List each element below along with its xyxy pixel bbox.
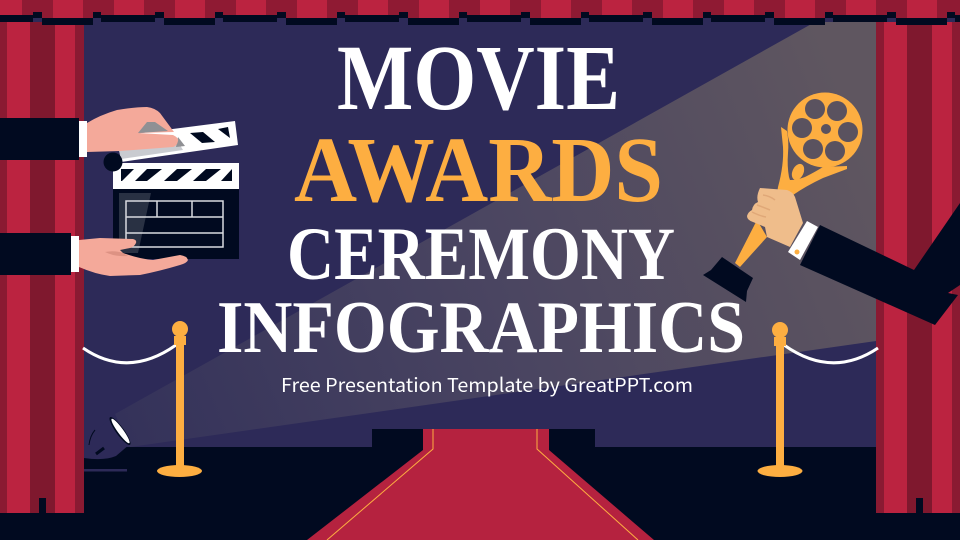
right curtain (876, 22, 960, 514)
title line: movie: MOVIE (337, 27, 620, 130)
right gold post (758, 322, 802, 477)
cuff (788, 221, 818, 260)
sleeve (800, 203, 960, 325)
left rope (83, 345, 176, 363)
clapper top stick (118, 121, 238, 162)
clapper board body (113, 189, 239, 259)
trophy figure (735, 127, 847, 267)
upper hand with sleeve (0, 107, 178, 160)
clapper table lines (126, 201, 223, 247)
spotlight beam (115, 22, 876, 447)
title line: infographics: INFOGRAPHICS (217, 287, 745, 369)
cufflink (794, 250, 800, 254)
right rope (784, 345, 878, 363)
clapper striped band (113, 163, 239, 189)
stage floor (0, 429, 960, 540)
film reel (788, 92, 862, 168)
left curtain (0, 22, 84, 514)
clapperboard (104, 121, 239, 259)
title line: ceremony: CEREMONY (287, 213, 675, 296)
lower hand with sleeve (0, 233, 188, 276)
top valance (0, 0, 960, 30)
clapper glare (119, 193, 151, 253)
red carpet (307, 429, 654, 540)
left gold post (157, 321, 202, 477)
subtitle: Free Presentation Template by GreatPPT.com (281, 371, 693, 398)
title line: awards: AWARDS (294, 119, 663, 222)
fist (747, 188, 803, 247)
trophy with film reel (703, 92, 862, 302)
title (217, 27, 745, 369)
spotlight lamp (84, 415, 133, 472)
right hand and arm (747, 188, 960, 325)
trophy base (703, 257, 753, 302)
clapper hinge (104, 152, 122, 172)
